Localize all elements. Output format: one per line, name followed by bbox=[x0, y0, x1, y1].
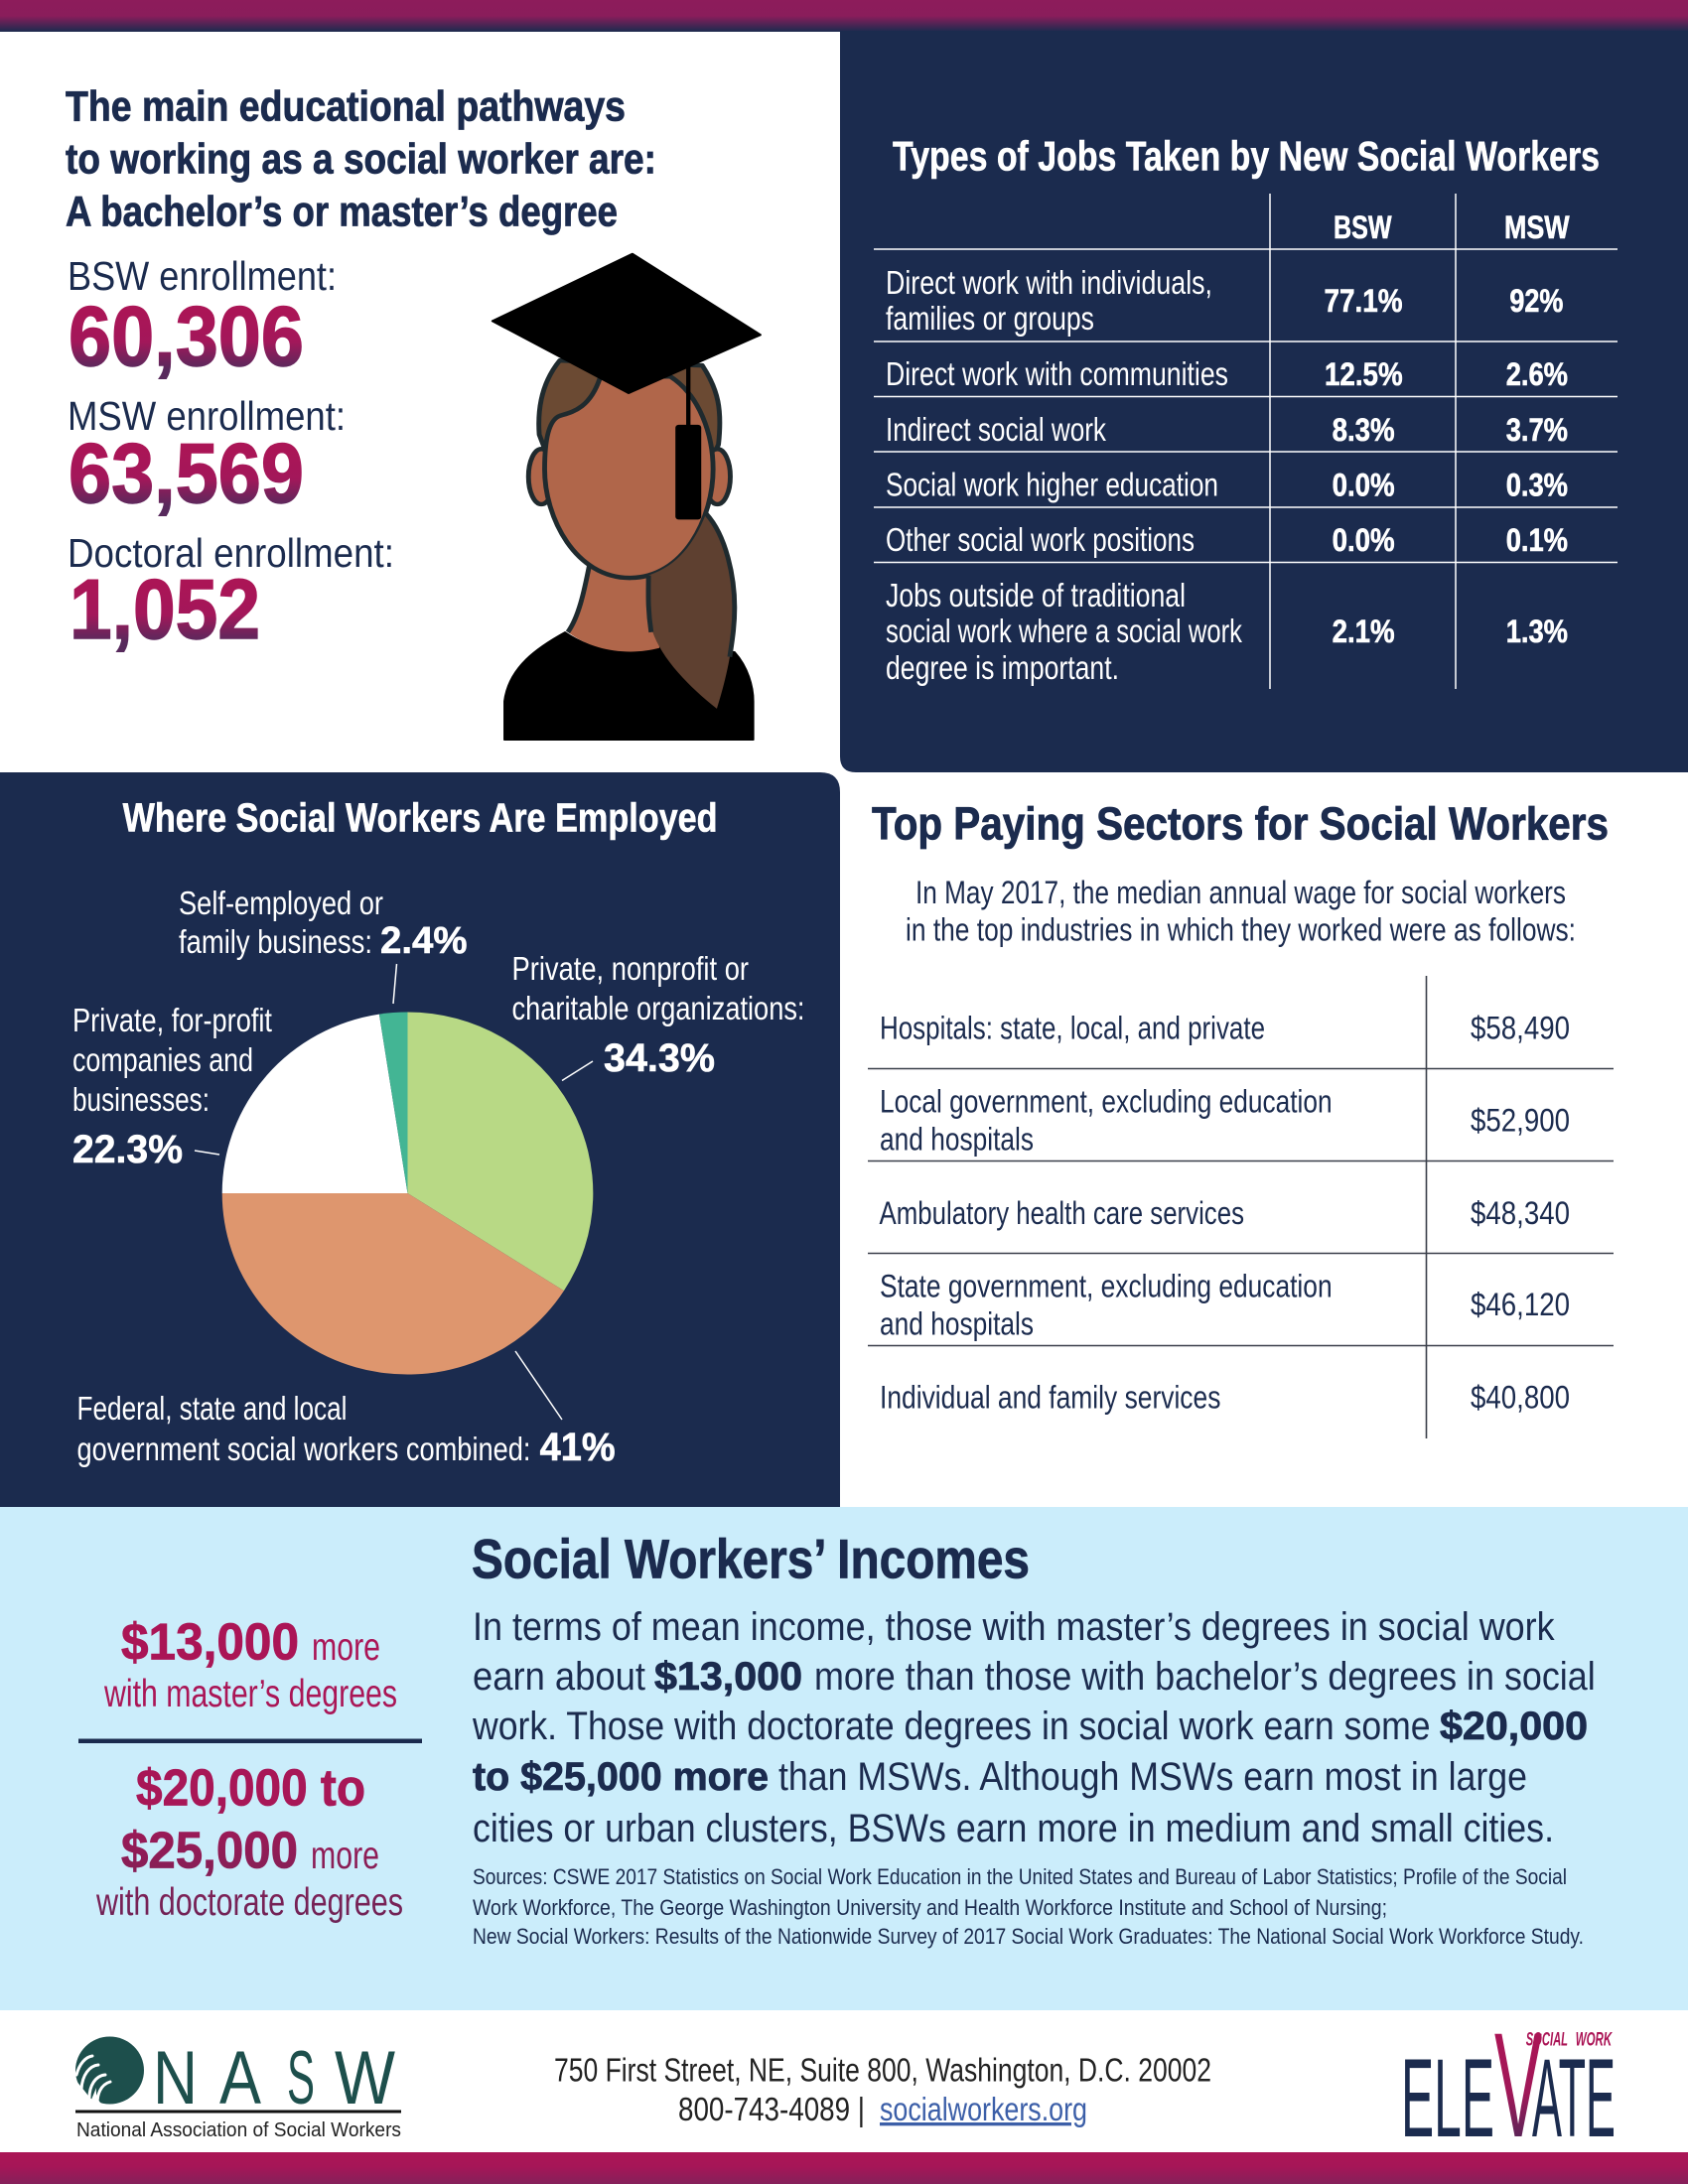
body paragraph: cities or urban clusters, BSWs earn more in medium and small cities. bbox=[473, 1807, 1554, 1850]
sources bbox=[473, 1864, 1584, 1949]
label: government: government social workers combined: bbox=[77, 1431, 530, 1467]
sector labels: State government, excluding education bbox=[880, 1269, 1333, 1304]
intro text: In May 2017, the median annual wage for social workers bbox=[915, 875, 1566, 910]
stat: MSW enrollment: MSW enrollment: bbox=[68, 393, 346, 439]
icon: graduate with cap bbox=[492, 254, 761, 740]
table: jobs by degree bbox=[874, 194, 1618, 689]
logo: NASW: National Association of Social Workers bbox=[76, 2119, 401, 2141]
table values: 12.5% bbox=[1325, 356, 1403, 392]
table values: 2.6% bbox=[1506, 356, 1568, 392]
stat: BSW enrollment bbox=[68, 253, 337, 384]
label: government bbox=[77, 1351, 616, 1469]
callout: income differences: more bbox=[311, 1835, 379, 1877]
panel: top paying sectors bbox=[868, 798, 1614, 1438]
contact address: 750 First Street, NE, Suite 800, Washington, D.C. 20002 bbox=[554, 2052, 1211, 2089]
callout: income differences: $20,000 to bbox=[136, 1759, 365, 1817]
callout: income differences: $25,000 bbox=[121, 1823, 298, 1880]
label: self-employed bbox=[179, 885, 467, 1004]
logo: NASW: A bbox=[219, 2036, 261, 2120]
body paragraph bbox=[472, 1605, 1596, 1850]
panel: educational pathways bbox=[66, 83, 761, 740]
sector labels: Local government, excluding education bbox=[880, 1084, 1333, 1120]
callout: income differences bbox=[78, 1614, 422, 1924]
table values: 0.0% bbox=[1333, 522, 1395, 558]
footer bbox=[75, 2001, 1616, 2168]
row labels bbox=[886, 264, 1242, 686]
sector labels: Individual and family services bbox=[880, 1380, 1220, 1416]
row labels: Other social work positions bbox=[886, 521, 1195, 558]
body paragraph: In terms of mean income, those with master’s degrees in social work bbox=[473, 1605, 1555, 1649]
sector labels bbox=[880, 1011, 1333, 1416]
logo: Social Work Elevate: ELE bbox=[1401, 2036, 1494, 2160]
wage values: $52,900 bbox=[1471, 1103, 1570, 1139]
wage values: $40,800 bbox=[1471, 1380, 1570, 1416]
heading: where employed: Where Social Workers Are Employed bbox=[123, 794, 718, 840]
wage values: $58,490 bbox=[1471, 1011, 1570, 1046]
logo: NASW: N bbox=[153, 2036, 198, 2120]
table values bbox=[1325, 283, 1568, 649]
label: private for-profit: 22.3% bbox=[72, 1128, 183, 1171]
label: private for-profit: Private, for-profit bbox=[72, 1002, 272, 1038]
heading: educational pathways bbox=[66, 83, 656, 236]
table values: 77.1% bbox=[1325, 283, 1402, 319]
pie chart bbox=[222, 1012, 593, 1375]
table values: 0.0% bbox=[1333, 467, 1395, 502]
table values: 1.3% bbox=[1506, 614, 1568, 649]
row labels: Direct work with communities bbox=[886, 355, 1228, 392]
label: government: Federal, state and local bbox=[77, 1390, 348, 1427]
logo: Social Work Elevate: V bbox=[1494, 2001, 1542, 2168]
body paragraph: more than those with bachelor’s degrees in social bbox=[814, 1655, 1596, 1699]
wage values: $48,340 bbox=[1471, 1195, 1570, 1231]
sector labels: Ambulatory health care services bbox=[880, 1195, 1244, 1231]
sector labels: Hospitals: state, local, and private bbox=[880, 1011, 1265, 1046]
label: government: 41% bbox=[540, 1426, 616, 1469]
stat: BSW enrollment: 60,306 bbox=[69, 290, 304, 384]
callout: income differences: with doctorate degrees bbox=[95, 1881, 403, 1924]
panel: types of jobs bbox=[840, 31, 1688, 772]
table values: 0.3% bbox=[1506, 467, 1568, 502]
table values: 2.1% bbox=[1333, 614, 1395, 649]
logo: Social Work Elevate: SOCIAL bbox=[1526, 2029, 1568, 2051]
body paragraph: earn about bbox=[473, 1655, 645, 1699]
bottom gradient bar bbox=[0, 2152, 1688, 2184]
wage values bbox=[1471, 1011, 1570, 1416]
label: private for-profit: companies and bbox=[72, 1041, 253, 1078]
label: self-employed: Self-employed or bbox=[179, 885, 383, 921]
body paragraph: $20,000 bbox=[1440, 1705, 1588, 1748]
table values: 3.7% bbox=[1506, 412, 1568, 448]
heading: social workers incomes: Social Workers’ Incomes bbox=[472, 1527, 1030, 1590]
callout: income differences: with master’s degrees bbox=[103, 1673, 397, 1715]
contact address bbox=[554, 2052, 1211, 2127]
contact address: 800-743-4089 | bbox=[678, 2091, 865, 2127]
label: private for-profit bbox=[72, 1002, 272, 1171]
stat: BSW enrollment: BSW enrollment: bbox=[68, 253, 337, 299]
body paragraph: $13,000 bbox=[654, 1655, 802, 1699]
label: private nonprofit bbox=[512, 950, 804, 1080]
logo: NASW: S bbox=[287, 2036, 315, 2120]
row labels: Social work higher education bbox=[886, 467, 1218, 502]
label: private nonprofit: charitable organizations: bbox=[512, 990, 804, 1026]
logo: NASW bbox=[75, 2036, 401, 2141]
callout: income differences: more bbox=[312, 1626, 380, 1669]
heading: top paying sectors: Top Paying Sectors for Social Workers bbox=[872, 798, 1609, 850]
row labels: families or groups bbox=[886, 300, 1094, 337]
body paragraph: to $25,000 more bbox=[473, 1755, 769, 1799]
callout: income differences: $13,000 bbox=[121, 1614, 299, 1672]
intro text bbox=[906, 875, 1576, 947]
logo: NASW: W bbox=[335, 2036, 395, 2120]
body paragraph: work. Those with doctorate degrees in social work earn some bbox=[472, 1705, 1431, 1748]
sector labels: and hospitals bbox=[880, 1305, 1034, 1341]
sources: Work Workforce, The George Washington University and Health Workforce Institute and School of Nursing; bbox=[473, 1895, 1387, 1920]
row labels: Direct work with individuals, bbox=[886, 264, 1212, 301]
table values: 8.3% bbox=[1333, 412, 1395, 448]
table header: BSW bbox=[1334, 209, 1392, 245]
panel: where social workers are employed bbox=[0, 772, 840, 1507]
label: self-employed: family business: bbox=[179, 923, 372, 960]
row labels: Jobs outside of traditional bbox=[886, 577, 1186, 614]
table: wages by sector bbox=[868, 976, 1614, 1438]
heading: educational pathways: A bachelor’s or master’s degree bbox=[66, 189, 618, 236]
stat: MSW enrollment: 63,569 bbox=[69, 427, 304, 521]
table values: 0.1% bbox=[1506, 522, 1568, 558]
panel: social workers incomes bbox=[0, 1507, 1688, 2010]
sector labels: and hospitals bbox=[880, 1122, 1034, 1158]
label: private for-profit: businesses: bbox=[72, 1081, 210, 1118]
table values: 92% bbox=[1509, 283, 1563, 319]
row labels: degree is important. bbox=[886, 649, 1119, 686]
table header: MSW bbox=[1504, 209, 1570, 245]
top gradient bar bbox=[0, 0, 1688, 32]
stat: doctoral enrollment bbox=[68, 530, 394, 657]
row labels: social work where a social work bbox=[886, 613, 1242, 649]
table header bbox=[1334, 209, 1570, 245]
label: self-employed: 2.4% bbox=[380, 920, 467, 962]
contact address: socialworkers.org bbox=[880, 2091, 1087, 2127]
logo: Social Work Elevate: WORK bbox=[1576, 2029, 1613, 2051]
stat: MSW enrollment bbox=[68, 393, 346, 521]
heading: educational pathways: The main educational pathways bbox=[66, 83, 626, 131]
body paragraph: than MSWs. Although MSWs earn most in large bbox=[778, 1755, 1527, 1799]
label: private nonprofit: 34.3% bbox=[604, 1036, 715, 1080]
label: private nonprofit: Private, nonprofit or bbox=[512, 950, 749, 987]
heading: educational pathways: to working as a social worker are: bbox=[66, 135, 656, 183]
row labels: Indirect social work bbox=[886, 411, 1106, 448]
stat: doctoral enrollment: 1,052 bbox=[70, 563, 260, 657]
stat: doctoral enrollment: Doctoral enrollment: bbox=[68, 530, 394, 576]
wage values: $46,120 bbox=[1471, 1287, 1570, 1322]
